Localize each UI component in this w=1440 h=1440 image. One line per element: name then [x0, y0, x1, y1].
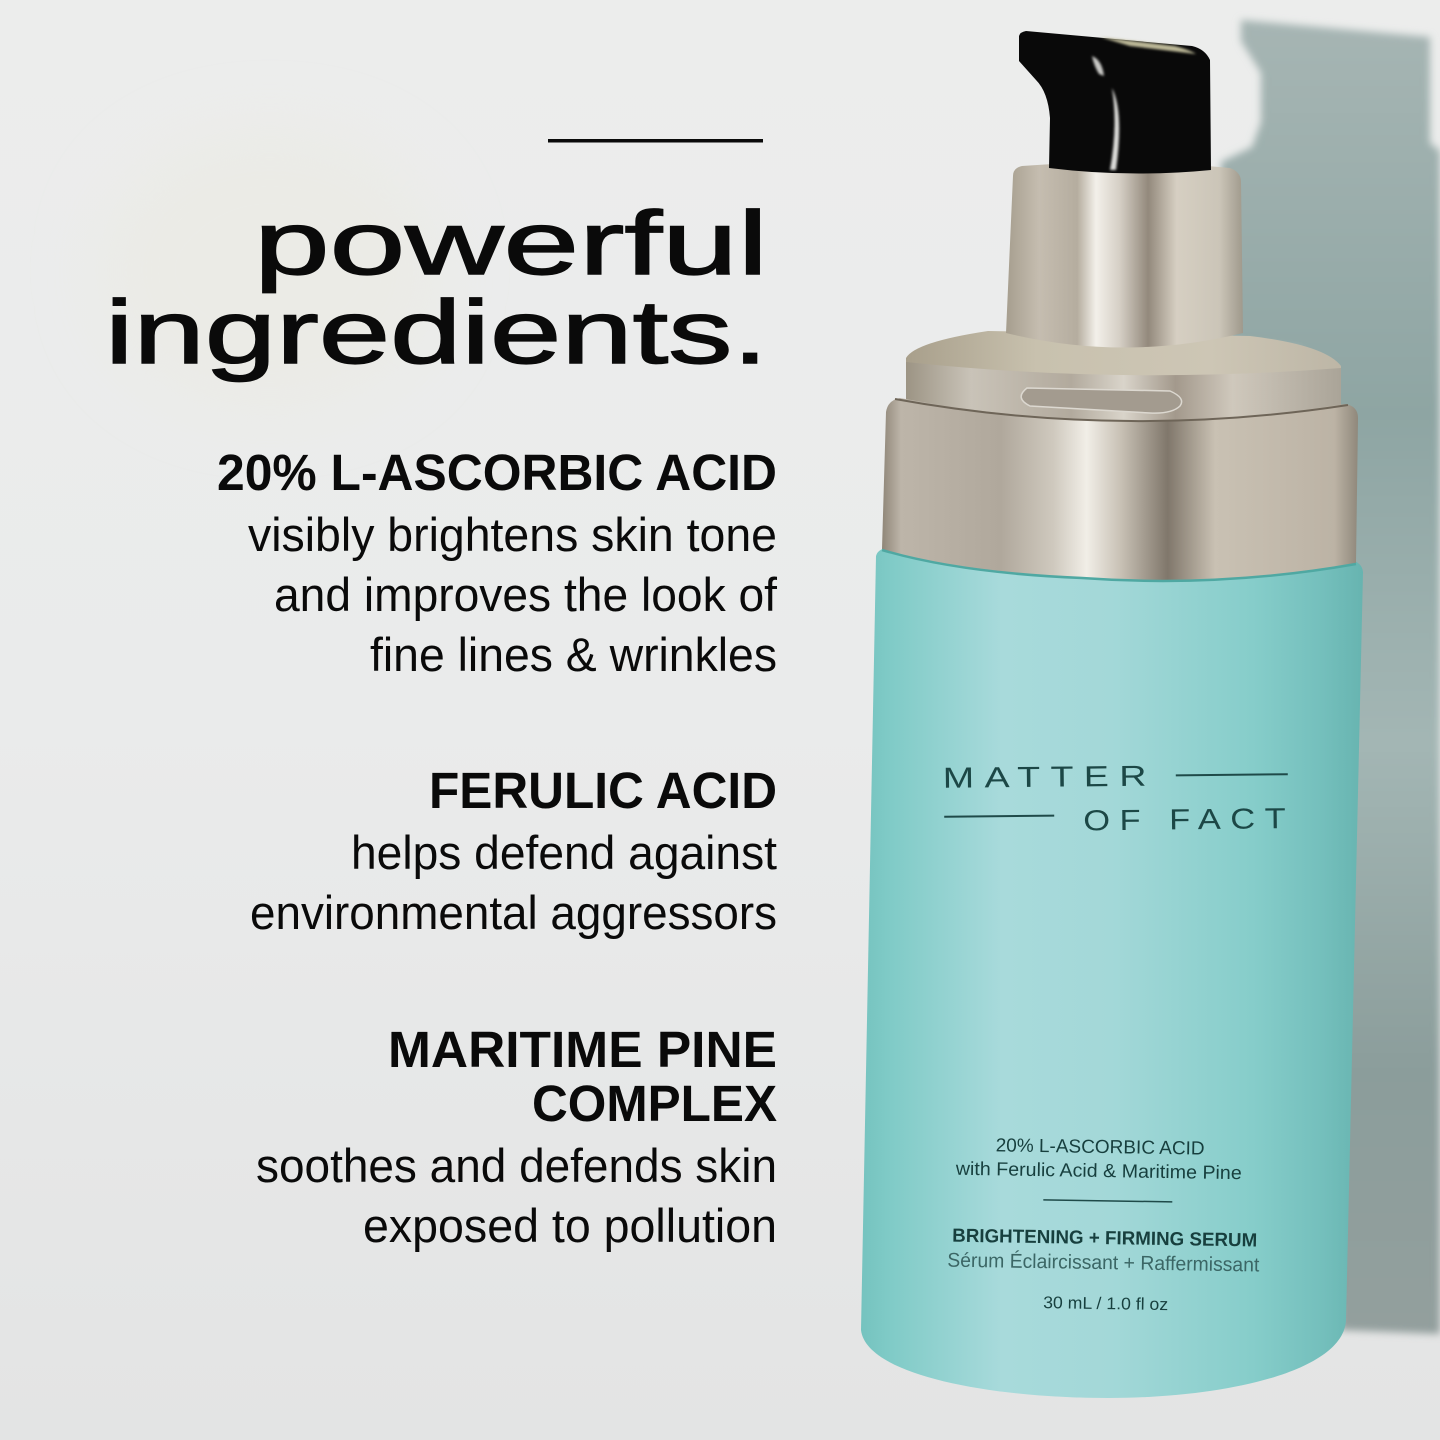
pump highlights [1092, 56, 1119, 170]
ingredient: maritime pine complex: soothes and defends skin [256, 1139, 777, 1192]
heading rule [548, 139, 763, 142]
cap top rim [895, 399, 1348, 421]
faint cream blob [100, 130, 440, 410]
label details [947, 1135, 1262, 1316]
pump head [1019, 31, 1211, 174]
ingredient: maritime pine complex: MARITIME PINE [388, 1021, 777, 1078]
ingredient: maritime pine complex: exposed to pollution [363, 1199, 777, 1252]
brand logo: MATTER [943, 761, 1157, 795]
ingredient: l-ascorbic acid: visibly brightens skin tone [248, 508, 777, 561]
title: powerful [254, 194, 768, 294]
metal cap [882, 398, 1358, 581]
ingredient: l-ascorbic acid: 20% L-ASCORBIC ACID [217, 444, 777, 501]
pump top reflection [1100, 37, 1196, 54]
label details: BRIGHTENING + FIRMING SERUM [952, 1226, 1257, 1251]
ingredient: l-ascorbic acid: and improves the look of [274, 568, 778, 621]
ingredient: l-ascorbic acid [217, 444, 778, 681]
ingredient: l-ascorbic acid: fine lines & wrinkles [370, 628, 777, 681]
ingredient: ferulic acid: FERULIC ACID [429, 762, 777, 819]
ingredient: maritime pine complex [256, 1021, 777, 1252]
pump neck [1006, 162, 1243, 348]
brand logo [943, 759, 1295, 839]
ingredient: ferulic acid [250, 762, 777, 939]
collar top surface [906, 331, 1341, 400]
ingredient: ferulic acid: environmental aggressors [250, 886, 777, 939]
title [105, 194, 768, 383]
collar slot [1021, 388, 1182, 413]
title: ingredients. [105, 283, 768, 383]
label details: 30 mL / 1.0 fl oz [1043, 1293, 1168, 1314]
product bottle [861, 31, 1363, 1398]
bottle shadow [1221, 20, 1440, 1334]
collar side band [906, 362, 1341, 430]
ingredient: ferulic acid: helps defend against [351, 826, 777, 879]
label details: 20% L-ASCORBIC ACID [995, 1135, 1205, 1160]
label details: with Ferulic Acid & Maritime Pine [955, 1159, 1242, 1184]
ingredient: maritime pine complex: COMPLEX [532, 1075, 777, 1132]
brand logo: OF FACT [1083, 803, 1295, 837]
bottle body [861, 548, 1363, 1398]
teal lip under cap [882, 550, 1356, 581]
label details: Sérum Éclaircissant + Raffermissant [947, 1249, 1260, 1277]
